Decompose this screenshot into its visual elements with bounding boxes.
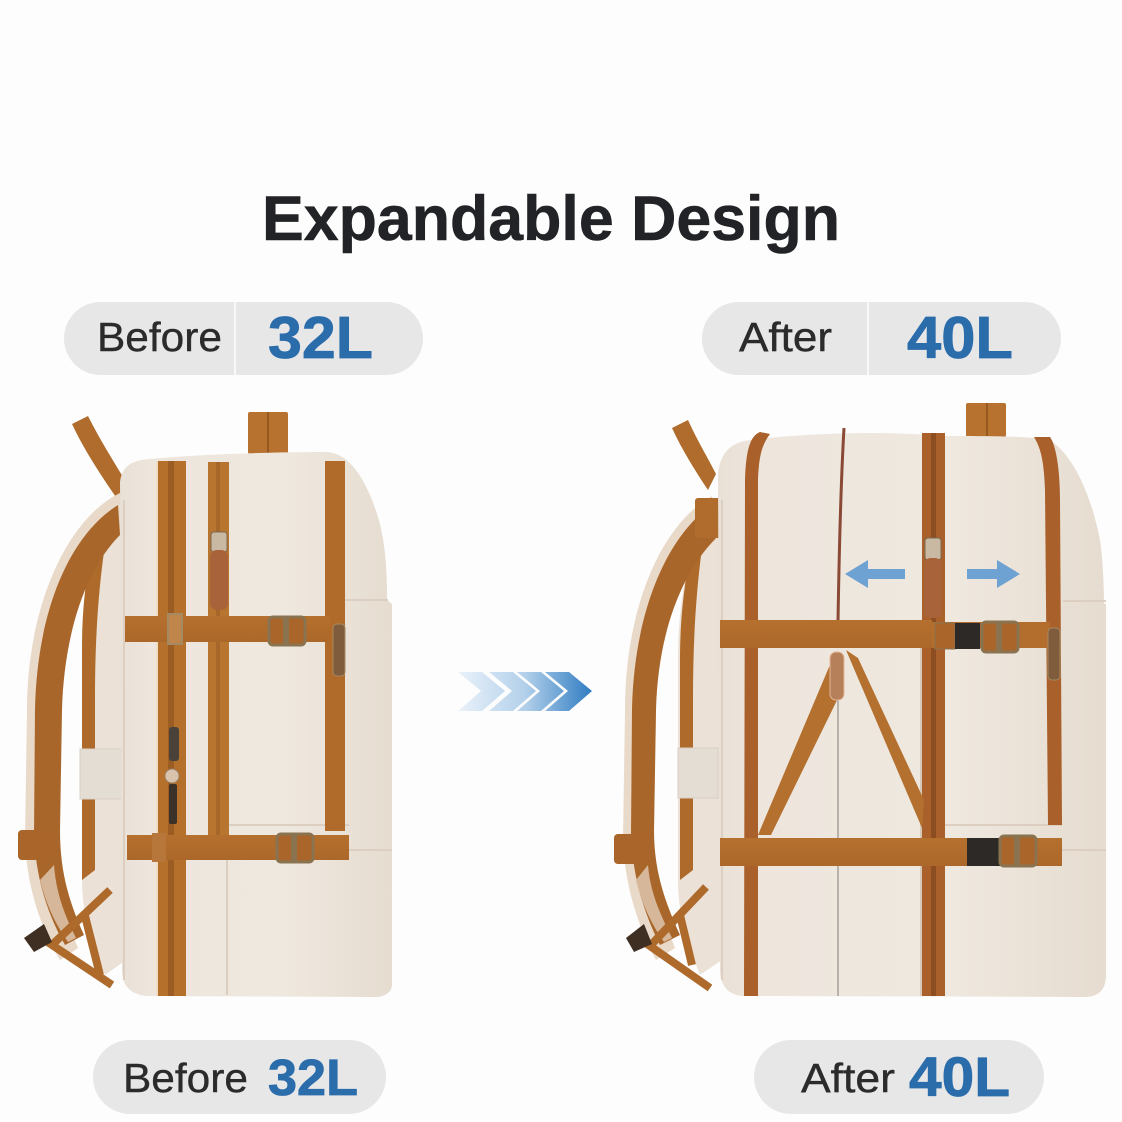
back panel (678, 500, 722, 975)
pill: before 32L top: 32L (268, 305, 373, 371)
pill: before 32L bottom: Before (123, 1055, 248, 1101)
zipper 3 (325, 461, 345, 831)
strap: lower (720, 836, 1062, 866)
zipper right (1034, 437, 1062, 825)
pill: before 32L top: Before (97, 314, 222, 360)
zipper pull: leather tab (924, 538, 942, 618)
zipper left (744, 432, 770, 996)
pill: after 40L top: After (739, 314, 832, 360)
strap: upper (125, 614, 330, 645)
top handle (248, 412, 288, 454)
strap: lower (127, 833, 349, 862)
side elastic band (80, 749, 122, 799)
pill: before 32L bottom: 32L (268, 1049, 358, 1106)
zipper pull: right (1048, 628, 1060, 680)
side hanger loop (72, 416, 126, 500)
arrow: left expansion (845, 560, 905, 588)
side elastic band (678, 748, 718, 798)
pill: after 40L bottom (754, 1040, 1044, 1114)
shoulder strap (18, 493, 122, 960)
lower straps (52, 890, 112, 985)
lower straps (650, 887, 710, 988)
strap: upper (720, 620, 1050, 652)
shoulder strap (614, 496, 722, 960)
body (120, 452, 392, 997)
zipper 2 (208, 462, 229, 835)
zipper pull: leather tab (210, 532, 228, 610)
zipper pull: V (830, 652, 844, 700)
title: Expandable Design (262, 184, 840, 254)
zipper pull: right (333, 624, 345, 676)
pill: after 40L bottom: After (801, 1055, 895, 1101)
arrow: right expansion (967, 560, 1020, 588)
top handle (966, 403, 1006, 437)
zipper center (920, 433, 945, 996)
body (718, 433, 1106, 997)
backpack: after (614, 403, 1106, 997)
back panel (82, 490, 126, 975)
zipper pull: center (165, 727, 179, 824)
backpack: before (18, 412, 392, 997)
pill: after 40L top (702, 302, 1061, 375)
arrow: expansion chevrons (458, 672, 592, 711)
pill: before 32L top (64, 302, 423, 375)
pill: after 40L bottom: 40L (909, 1045, 1010, 1108)
pill: after 40L top: 40L (907, 305, 1013, 371)
center gusset line (837, 428, 844, 996)
expansion V straps (758, 650, 924, 835)
side hanger loop (672, 420, 716, 490)
pill: before 32L bottom (93, 1040, 386, 1114)
zipper 1 (156, 461, 186, 996)
